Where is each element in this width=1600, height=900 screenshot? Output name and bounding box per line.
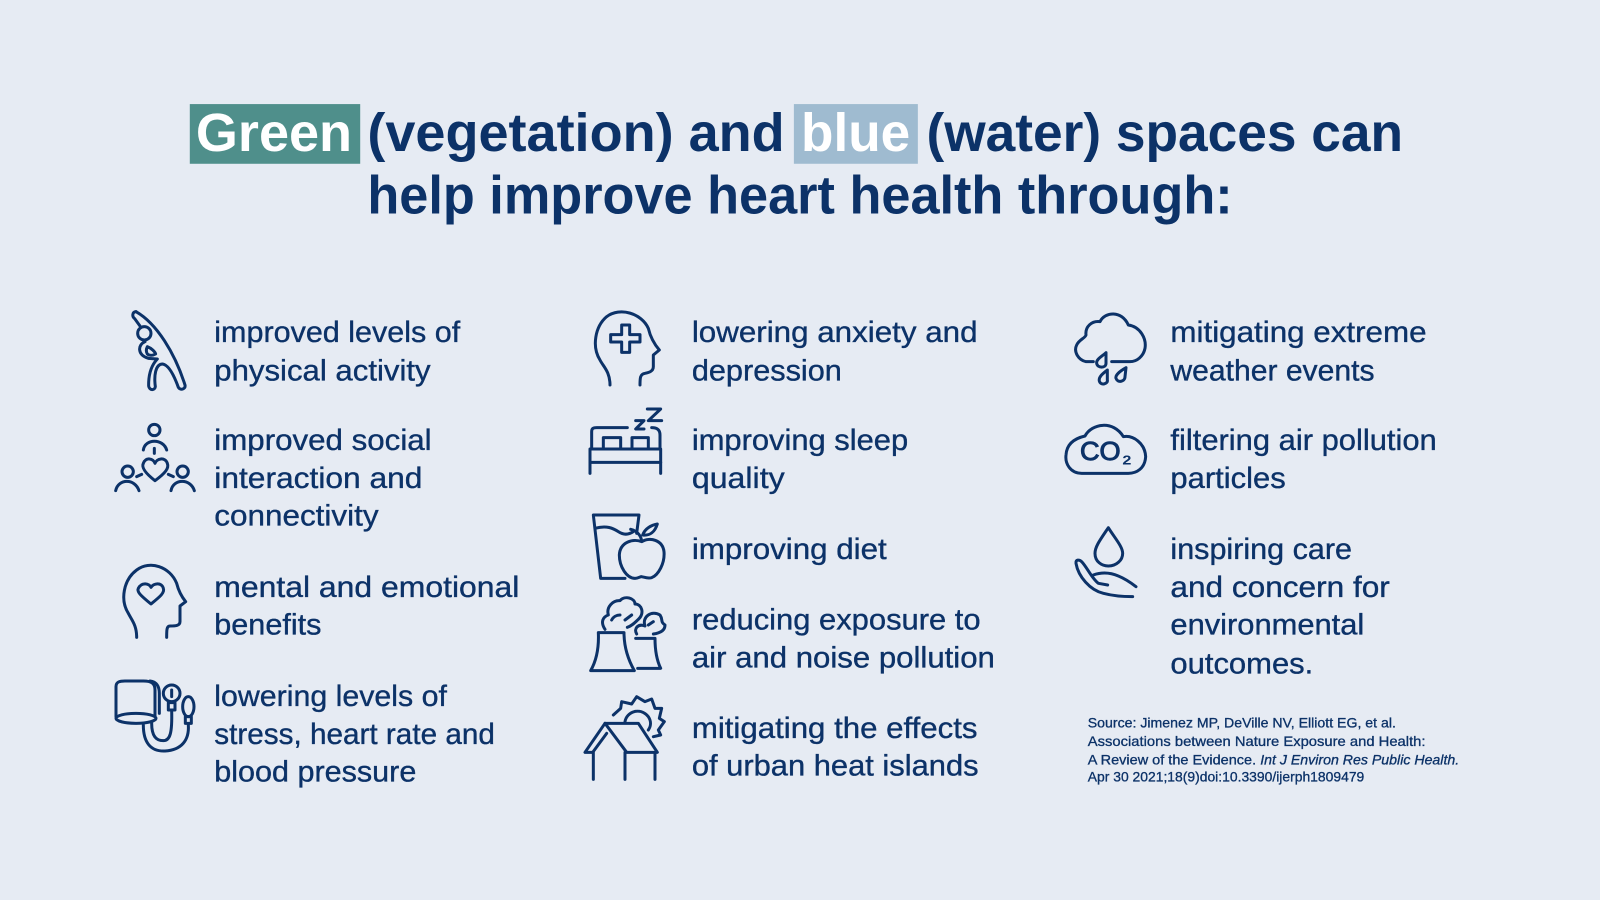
column 1 text	[214, 316, 519, 789]
title: help improve heart health through:	[367, 165, 1233, 225]
text: extreme weather	[1169, 316, 1427, 388]
icon: people and heart	[116, 424, 194, 491]
text: anxiety	[692, 316, 978, 388]
text: sleep: quality	[692, 462, 785, 495]
icon: factory cooling towers	[591, 598, 665, 671]
text: care and concern	[1170, 533, 1390, 680]
source citation	[1088, 716, 1459, 785]
column 2 text	[692, 316, 995, 783]
text: physical activity: improved levels of	[214, 316, 461, 349]
title: (water) spaces can	[927, 103, 1403, 163]
source citation: Source: Jimenez MP, DeVille NV, Elliott EG, et al.	[1088, 716, 1396, 731]
icon: head with heart	[124, 565, 186, 637]
text: social interaction	[214, 424, 432, 533]
text: care and concern: environmental	[1170, 609, 1364, 642]
icon: CO2 cloud: 2	[1122, 453, 1131, 468]
text: social interaction: improved social	[214, 424, 432, 457]
text: social interaction: connectivity	[214, 500, 379, 533]
text: care and concern: and concern for	[1170, 571, 1390, 604]
source citation: A Review of the Evidence.	[1088, 752, 1256, 767]
text: urban heat: mitigating the effects	[692, 712, 978, 745]
title: (vegetation) and	[367, 103, 785, 163]
text: social interaction: interaction and	[214, 462, 422, 495]
title: Green	[196, 103, 352, 163]
text: pollution exposure: reducing exposure to	[692, 604, 981, 637]
icon: glass and apple	[593, 515, 664, 578]
column 3 text	[1169, 316, 1437, 680]
text: sleep	[692, 424, 908, 495]
text: extreme weather: mitigating extreme	[1170, 316, 1427, 349]
text: urban heat	[692, 712, 979, 783]
text: stress and blood pressure: blood pressure	[214, 756, 416, 789]
text: sleep: improving sleep	[692, 424, 908, 457]
text: stress and blood pressure	[214, 680, 495, 789]
title: blue	[801, 103, 910, 163]
text: pollution exposure: air and noise pollution	[692, 641, 995, 674]
text: air filtering: particles	[1170, 462, 1286, 495]
source citation: Apr 30 2021;18(9)doi:10.3390/ijerph1809479	[1088, 770, 1364, 785]
highlight: green	[190, 104, 360, 164]
icon: bed with zzz	[590, 409, 662, 473]
icon: CO2 cloud: CO	[1080, 436, 1121, 466]
text: care and concern: outcomes.	[1170, 647, 1313, 680]
icon: blood pressure cuff	[116, 681, 194, 751]
text: anxiety: depression	[692, 355, 842, 388]
text: care and concern: inspiring care	[1170, 533, 1352, 566]
text: stress and blood pressure: stress, heart rate and	[214, 718, 495, 751]
icon: rain cloud	[1076, 314, 1145, 384]
source citation: Associations between Nature Exposure and Health:	[1088, 734, 1426, 749]
text: mental benefits: benefits	[214, 609, 321, 642]
text: extreme weather: weather events	[1169, 355, 1374, 388]
source citation: Int J Environ Res Public Health.	[1260, 752, 1459, 767]
text: physical activity	[214, 316, 461, 388]
highlight: blue	[794, 104, 918, 164]
text: air filtering	[1170, 424, 1437, 495]
text: mental benefits	[214, 571, 519, 642]
icon: hand with water drop	[1076, 528, 1136, 597]
text: mental benefits: mental and emotional	[214, 571, 519, 604]
text: urban heat: of urban heat islands	[692, 750, 979, 783]
text: stress and blood pressure: lowering levels of	[214, 680, 448, 713]
text: physical activity: physical activity	[214, 355, 431, 388]
icon: house with sun	[585, 697, 664, 779]
title	[190, 103, 1403, 225]
text: air filtering: filtering air pollution	[1170, 424, 1437, 457]
text: pollution exposure	[692, 604, 995, 674]
icon: head with plus	[595, 312, 659, 385]
icon: CO2 cloud	[1066, 425, 1146, 473]
text: diet: improving diet	[692, 533, 887, 566]
icon: stretching figure	[133, 312, 185, 390]
text: anxiety: lowering anxiety and	[692, 316, 978, 349]
